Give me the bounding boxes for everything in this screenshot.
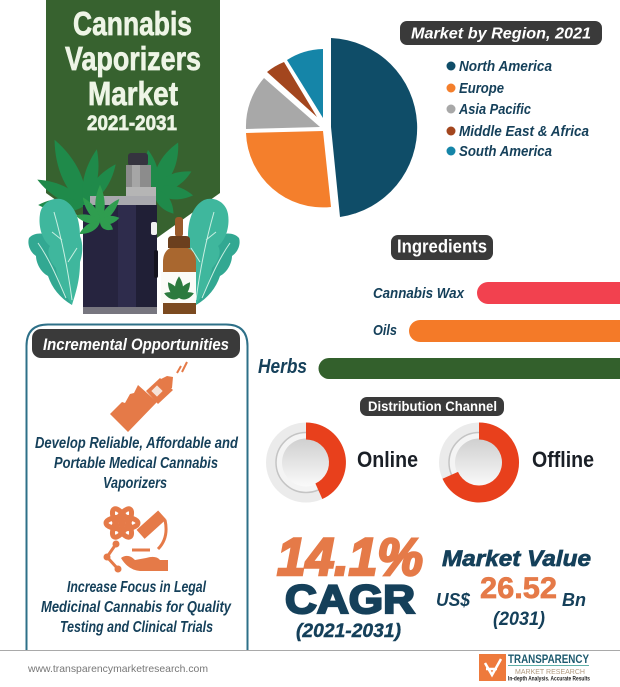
stat: market value xyxy=(436,546,591,630)
footer: website: www.transparencymarketresearch.com xyxy=(27,663,208,675)
icon: vaporizer pen xyxy=(110,362,187,432)
text: first opportunity: Vaporizers xyxy=(103,475,167,492)
icon: logo mark xyxy=(479,654,506,681)
bar: cannabis wax xyxy=(373,282,620,304)
logo: transparency market research: In-depth Analysis. Accurate Results xyxy=(508,676,590,682)
legend: regions: Europe xyxy=(459,81,504,97)
heading: market by region: Market by Region, 2021 xyxy=(411,26,591,42)
donut chart: offline xyxy=(439,422,594,503)
panel: incremental opportunities xyxy=(26,324,248,650)
icon: bottle label leaf xyxy=(163,276,195,301)
text: second opportunity: Medicinal Cannabis for Quality xyxy=(41,599,232,616)
footer rule xyxy=(0,650,620,651)
illustration: vaporizer, leaves and bottle xyxy=(28,136,240,314)
stat: market value: US$ xyxy=(436,590,471,610)
title banner xyxy=(46,0,220,255)
title: market name: Vaporizers xyxy=(65,40,201,77)
legend: regions: North America xyxy=(459,59,552,75)
title: years: 2021-2031 xyxy=(87,112,177,135)
legend: regions: South America xyxy=(459,144,552,160)
text: second opportunity: Increase Focus in Legal xyxy=(67,579,207,596)
donut chart: online xyxy=(266,422,418,502)
icon: small cannabis leaf xyxy=(75,185,122,238)
stat: market value: 26.52 xyxy=(480,572,557,605)
icon: oil bottle xyxy=(161,217,196,314)
legend: regions: Middle East & Africa xyxy=(459,124,589,140)
icon: large cannabis leaf right xyxy=(142,139,194,217)
pie chart: market by region xyxy=(246,38,417,217)
icon: science and microscope xyxy=(104,506,168,572)
stat: cagr: 14.1% xyxy=(277,528,423,587)
text: second opportunity xyxy=(41,579,232,636)
bar: herbs xyxy=(258,356,620,379)
bar: herbs: Herbs xyxy=(258,356,307,378)
text: second opportunity: Testing and Clinical Trials xyxy=(60,619,213,636)
heading: ingredients: Ingredients xyxy=(397,236,487,256)
title: market name: Cannabis xyxy=(73,5,192,42)
legend: regions xyxy=(446,59,589,160)
stat: cagr: (2021-2031) xyxy=(296,620,401,642)
heading: incremental opportunities xyxy=(32,329,240,358)
logo: transparency market research: MARKET RESEARCH xyxy=(515,667,585,676)
stat: market value: Bn xyxy=(562,590,586,610)
donut chart: online: Online xyxy=(357,447,418,472)
text: first opportunity: Portable Medical Cannabis xyxy=(54,455,218,472)
heading: distribution channel: Distribution Channel xyxy=(368,398,497,414)
icon: large cannabis leaf left xyxy=(34,136,121,212)
donut chart: offline: Offline xyxy=(532,447,594,472)
text: first opportunity xyxy=(35,435,238,492)
stat: cagr: CAGR xyxy=(285,578,415,622)
stat: market value: (2031) xyxy=(493,608,545,630)
bar chart: ingredients xyxy=(258,282,620,379)
stat: market value: Market Value xyxy=(442,546,591,571)
logo: transparency market research: TRANSPARENCY xyxy=(508,652,589,666)
logo: transparency market research xyxy=(479,652,590,682)
icon: vaporizer xyxy=(83,153,158,314)
icon: teal leaves right xyxy=(186,199,240,305)
icon: teal leaves left xyxy=(28,199,82,305)
bar: oils xyxy=(373,320,620,342)
stat: cagr xyxy=(277,528,423,642)
text: first opportunity: Develop Reliable, Affordable and xyxy=(35,435,238,452)
bar: oils: Oils xyxy=(373,323,397,339)
title: market name xyxy=(65,5,201,112)
heading: incremental opportunities: Incremental Opportunities xyxy=(43,335,229,354)
title: market name: Market xyxy=(88,75,178,112)
bar: cannabis wax: Cannabis Wax xyxy=(373,286,465,302)
legend: regions: Asia Pacific xyxy=(458,102,531,118)
heading: market by region xyxy=(400,21,602,45)
